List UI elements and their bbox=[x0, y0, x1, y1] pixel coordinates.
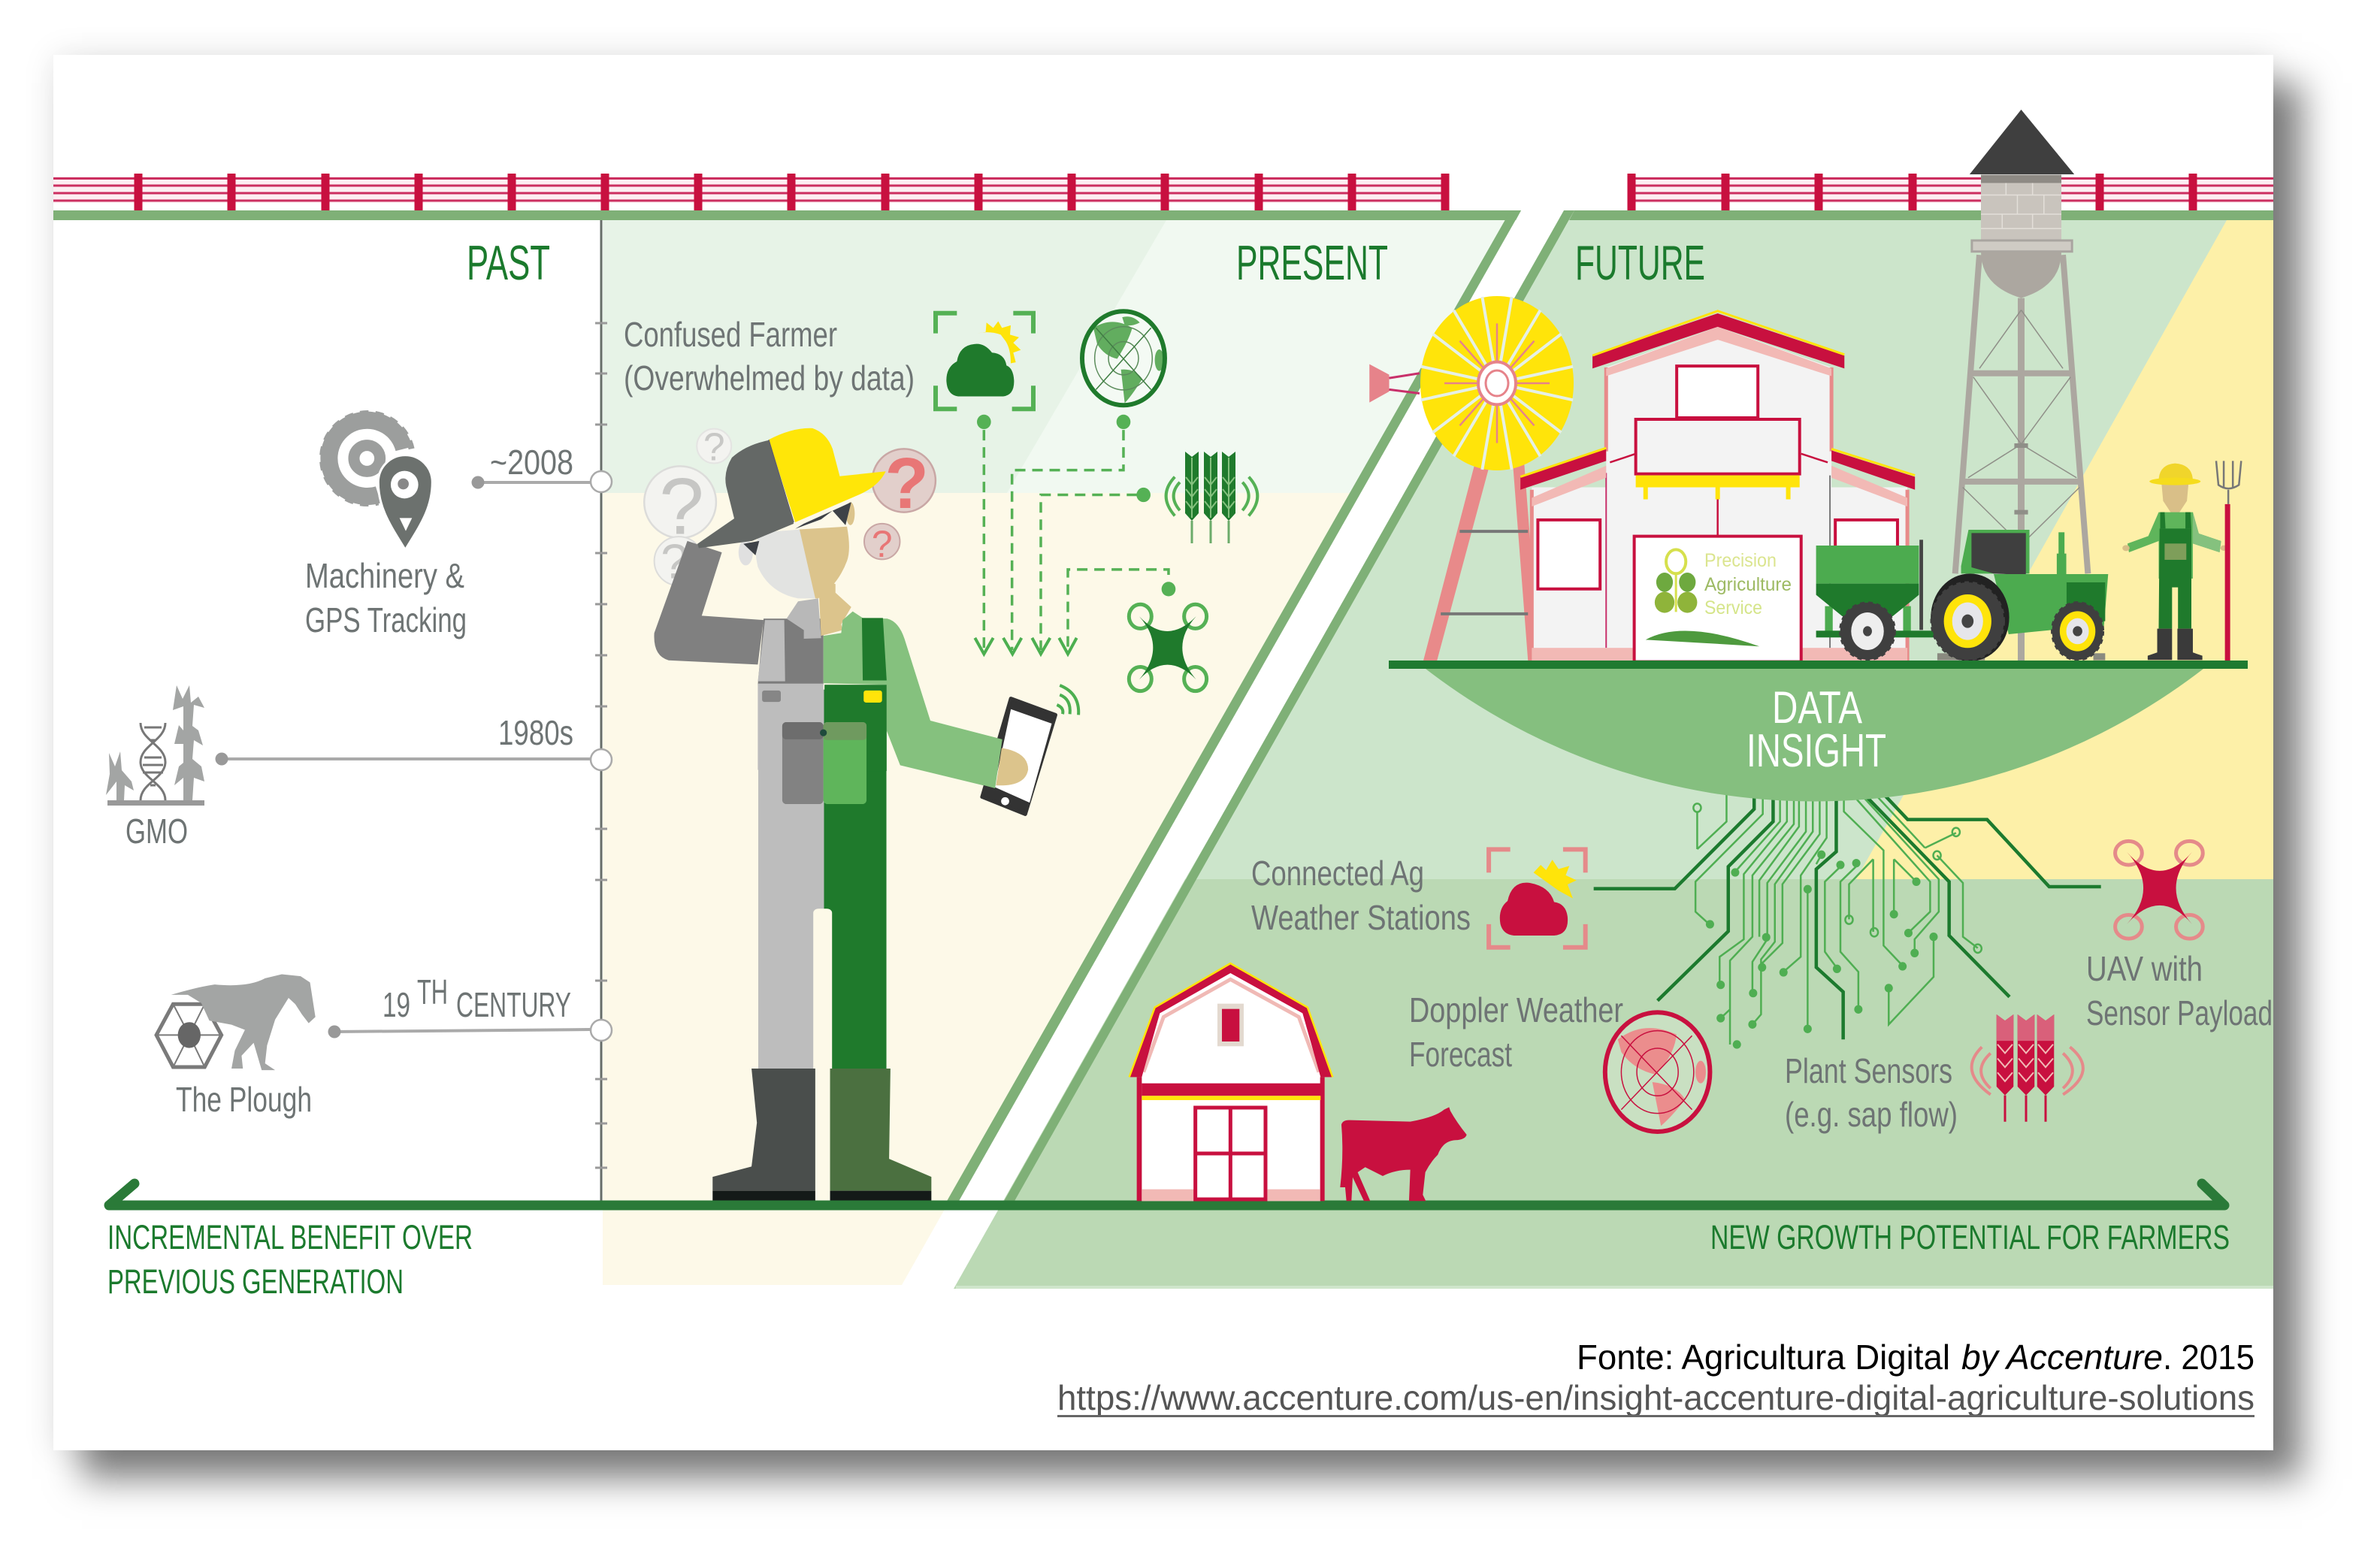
grey half torso and arm bbox=[654, 541, 764, 664]
text: door sign: Agriculture bbox=[1704, 574, 1792, 595]
axis arrow bbox=[109, 1184, 2224, 1205]
windmill tower bbox=[1369, 364, 1539, 661]
question mark bubbles: ? bbox=[885, 443, 929, 524]
main traces bbox=[1594, 794, 2101, 1039]
fence: left section bbox=[53, 174, 1445, 210]
text: Plant Sensors: (e.g. sap flow) bbox=[1785, 1095, 1958, 1134]
illustration: windmill bbox=[1369, 296, 1574, 661]
icon: crimson radar globe bbox=[1605, 1012, 1710, 1132]
illustration: pitchfork bbox=[2216, 461, 2241, 661]
icon: crimson wheat sensors bbox=[1972, 1014, 2083, 1122]
text: The Plough: The Plough bbox=[176, 1080, 312, 1119]
label: 19th century: CENTURY bbox=[456, 985, 571, 1024]
text: GMO: GMO bbox=[126, 812, 188, 851]
source credit: . 2015 bbox=[2163, 1338, 2254, 1377]
source credit: Fonte: Agricultura Digital bbox=[1577, 1338, 1950, 1377]
text: incremental benefit: INCREMENTAL BENEFIT OVER bbox=[107, 1218, 473, 1256]
icon: crimson UAV drone bbox=[2115, 841, 2203, 939]
icon: connected weather station bbox=[1489, 849, 1586, 948]
text: DATA INSIGHT bbox=[1746, 682, 1886, 777]
label: 19th century: 19 bbox=[383, 985, 410, 1024]
text: Confused Farmer: Confused Farmer bbox=[624, 315, 837, 354]
illustration: data insight bowl bbox=[1426, 669, 2203, 801]
circuit: data insight roots bbox=[1594, 794, 2101, 1049]
text: Machinery & GPS Tracking: Machinery & bbox=[305, 556, 464, 595]
small farmer bbox=[2122, 464, 2227, 660]
text: UAV with Sensor Payload: UAV with bbox=[2086, 949, 2203, 988]
text: UAV with Sensor Payload: Sensor Payload bbox=[2086, 993, 2273, 1032]
icon: weather station bbox=[936, 313, 1033, 409]
question mark bubbles: ? bbox=[661, 534, 688, 589]
face bbox=[739, 540, 753, 565]
text: UAV with Sensor Payload bbox=[2086, 949, 2273, 1032]
text: Connected Ag Weather Stations: Weather Stations bbox=[1251, 898, 1471, 937]
legs and boots bbox=[712, 690, 931, 1202]
illustration: split farmer bbox=[644, 425, 1078, 1202]
text: Machinery & GPS Tracking bbox=[305, 556, 467, 639]
text: Doppler Weather Forecast: Forecast bbox=[1409, 1035, 1512, 1074]
icon: drone bbox=[1129, 604, 1207, 691]
cap bbox=[697, 440, 794, 548]
illustration: small barn bbox=[1130, 963, 1332, 1201]
text: Confused Farmer bbox=[624, 315, 915, 398]
icon: radar globe bbox=[1082, 311, 1165, 405]
text: incremental benefit bbox=[107, 1218, 473, 1301]
illustration: cow bbox=[1340, 1107, 1467, 1201]
text: Confused Farmer: (Overwhelmed by data) bbox=[624, 358, 915, 398]
icon: plough and horse bbox=[156, 974, 316, 1070]
hollow trace ends bbox=[1693, 803, 1982, 953]
text: door sign: Precision bbox=[1704, 550, 1777, 571]
question mark bubbles: ? bbox=[872, 523, 893, 565]
icon: signal arcs for wheat bbox=[1166, 477, 1257, 515]
text: incremental benefit: PREVIOUS GENERATION bbox=[107, 1262, 404, 1301]
text: Doppler Weather Forecast: Doppler Weather bbox=[1409, 990, 1623, 1029]
green half shirt bbox=[824, 612, 1003, 788]
green frame band and diagonals bbox=[53, 210, 2273, 1202]
neck bbox=[818, 579, 851, 636]
heading: FUTURE: FUTURE bbox=[1575, 235, 1705, 290]
heading: PRESENT: PRESENT bbox=[1236, 235, 1388, 290]
source link: https://www.accenture.com/us-en/insight-accenture-digital-agriculture-solutions bbox=[1057, 1378, 2254, 1417]
text: Doppler Weather Forecast bbox=[1409, 990, 1623, 1074]
data flow icons: present bbox=[936, 311, 1257, 691]
trace dots bbox=[1706, 851, 1937, 1049]
text: Machinery & GPS Tracking: GPS Tracking bbox=[305, 600, 467, 639]
source credit bbox=[1577, 1338, 2254, 1377]
question mark bubbles bbox=[644, 425, 936, 589]
text: Connected Ag Weather Stations bbox=[1251, 854, 1471, 937]
source credit: by Accenture bbox=[1961, 1338, 2163, 1377]
text: door sign bbox=[1704, 550, 1792, 618]
illustration: big barn with service door bbox=[1520, 311, 1915, 662]
question mark bubbles: ? bbox=[703, 425, 725, 469]
tractor bbox=[1931, 530, 2108, 661]
label: 19th century bbox=[383, 972, 571, 1024]
panel: past and present background bbox=[603, 220, 1505, 1285]
fence: right section bbox=[1632, 174, 2273, 210]
ground platform bbox=[1389, 661, 2248, 669]
phone bbox=[982, 699, 1055, 814]
illustration: water tower bbox=[1955, 110, 2088, 661]
text: DATA INSIGHT: INSIGHT bbox=[1746, 725, 1886, 777]
question mark bubbles: ? bbox=[659, 461, 704, 551]
upper body bbox=[654, 428, 1078, 814]
icon: gear and GPS pin bbox=[322, 413, 432, 550]
icon: GMO crops and DNA bbox=[106, 685, 204, 806]
illustration: tractor and hopper bbox=[1816, 464, 2227, 661]
text: door sign: Service bbox=[1704, 597, 1762, 618]
text: Plant Sensors bbox=[1785, 1051, 1958, 1134]
icon: green wheat bbox=[1185, 452, 1235, 543]
label: 19th century: TH bbox=[417, 972, 448, 1011]
timeline bbox=[215, 220, 612, 1202]
thin traces bbox=[1695, 794, 1978, 1045]
label: 1980s: 1980s bbox=[498, 713, 573, 752]
dashed arrows bbox=[975, 415, 1175, 654]
label: ~2008: ~2008 bbox=[490, 443, 573, 482]
windmill wheel bbox=[1420, 296, 1574, 470]
text: Connected Ag Weather Stations: Connected Ag bbox=[1251, 854, 1424, 893]
panel: future background bbox=[954, 220, 2273, 1289]
text: Plant Sensors: Plant Sensors bbox=[1785, 1051, 1952, 1090]
heading: PAST: PAST bbox=[467, 235, 550, 290]
text: DATA INSIGHT: DATA bbox=[1772, 682, 1862, 733]
logo: precision agriculture bbox=[1646, 549, 1759, 646]
hopper bbox=[1816, 540, 1935, 660]
